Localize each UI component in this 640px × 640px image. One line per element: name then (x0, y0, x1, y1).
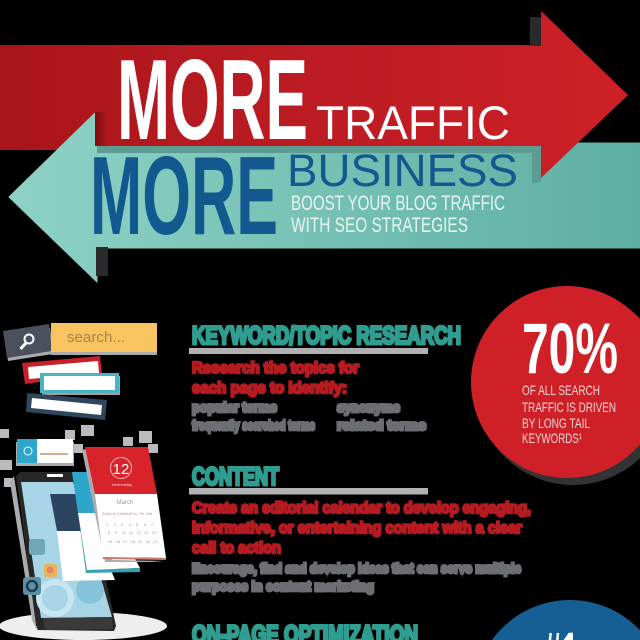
red calendar: Mon (108, 511, 116, 516)
red calendar: 13 (144, 530, 149, 535)
red description (192, 360, 359, 397)
red calendar: Wed (123, 511, 131, 516)
bottom row clipped at the frame edge (192, 600, 640, 640)
red calendar (82, 447, 166, 562)
red calendar: Sat (146, 511, 153, 516)
red calendar: 21 (153, 539, 158, 544)
red calendar: 12 (113, 461, 129, 478)
red calendar: Fri (140, 511, 144, 516)
red calendar: 10 (122, 530, 127, 535)
stat caption (522, 382, 616, 446)
blue calendar card (72, 472, 140, 573)
stat circle: #1 (474, 600, 640, 640)
subtitle (291, 192, 505, 237)
red calendar: 12 (137, 530, 142, 535)
red calendar: 8 (108, 530, 111, 535)
red calendar: 19 (138, 539, 143, 544)
stat caption: OF ALL SEARCH (522, 382, 600, 398)
red calendar: wednesday (112, 482, 132, 487)
heading: CONTENT (192, 463, 279, 491)
illustration: search bar and result cards (3, 323, 157, 420)
red calendar: 5 (136, 522, 139, 527)
red calendar: 16 (116, 539, 121, 544)
teal result card (40, 373, 120, 395)
red result card (22, 356, 102, 384)
search input (51, 323, 157, 355)
blue circle (474, 600, 640, 640)
navy calendar card (50, 494, 115, 581)
grey description: Encourage, find and develop ideas that can serve multiple (192, 560, 521, 576)
title: TRAFFIC: TRAFFIC (316, 96, 510, 149)
grey keyword list (192, 399, 426, 433)
platform ellipse (0, 612, 167, 640)
red description: each page to identify: (192, 380, 347, 397)
red arrow pointing right (95, 11, 628, 178)
grey description (192, 560, 521, 594)
red calendar: 3 (121, 522, 124, 527)
search input: search... (67, 329, 125, 346)
red arrow tail (0, 45, 100, 150)
red calendar: 18 (131, 539, 136, 544)
stat caption: KEYWORDS¹ (522, 430, 582, 446)
red shade beside teal head (95, 112, 108, 146)
red calendar: 1 (106, 522, 109, 527)
red calendar: Tue (117, 511, 124, 516)
red calendar: Sun (101, 511, 109, 516)
stat circle: 70% (471, 286, 640, 485)
red calendar: 2 (114, 522, 117, 527)
search icon tile (3, 324, 53, 361)
teal arrow pointing left (9, 113, 640, 282)
stat caption: BY LONG TAIL (522, 415, 590, 431)
red calendar: 15 (108, 539, 113, 544)
rule (189, 488, 428, 494)
red description: informative, or entertaining content with a clear (192, 520, 522, 537)
red calendar: 6 (144, 522, 147, 527)
title: MORE blue: MORE (90, 134, 278, 258)
rule (189, 348, 428, 354)
circle shadow (476, 291, 640, 485)
red circle (471, 286, 640, 478)
small notification card (16, 439, 74, 466)
red calendar: 14 (152, 530, 157, 535)
dark fold on red arrow head (530, 17, 541, 46)
app icons (23, 539, 57, 595)
red description: Create an editorial calendar to develop engaging, (192, 500, 531, 517)
red description: call to action (192, 540, 281, 557)
phone (10, 472, 116, 632)
red description: Research the topics for (192, 360, 359, 377)
red calendar: 9 (115, 530, 118, 535)
title: MORE: MORE (117, 37, 308, 164)
red calendar: 4 (129, 522, 132, 527)
grey keyword list: related terms (337, 417, 426, 433)
grey keyword list: synonyms (337, 399, 400, 415)
red description (192, 500, 531, 557)
red calendar: 7 (151, 522, 154, 527)
dark fold on teal arrow head (96, 247, 108, 276)
banner: arrows and title (0, 11, 640, 282)
red calendar: Thu (131, 511, 137, 516)
red calendar: 20 (146, 539, 151, 544)
grey keyword list: popular terms (192, 399, 277, 415)
floating squares (0, 425, 158, 487)
section: content (189, 463, 531, 594)
red calendar: 17 (123, 539, 128, 544)
subtitle: BOOST YOUR BLOG TRAFFIC (291, 192, 505, 215)
grey keyword list: frequently searched terms (192, 417, 315, 433)
section: keyword research (189, 322, 461, 433)
grey description: purposes in content marketing (192, 578, 374, 594)
red calendar: March (117, 500, 133, 506)
heading: KEYWORD/TOPIC RESEARCH (192, 322, 461, 350)
teal shadow under red band (97, 146, 541, 184)
subtitle: WITH SEO STRATEGIES (291, 214, 468, 237)
illustration: phone with calendars (0, 425, 167, 640)
navy result card (26, 393, 107, 420)
red calendar: 11 (129, 530, 134, 535)
title: BUSINESS: BUSINESS (287, 145, 518, 196)
